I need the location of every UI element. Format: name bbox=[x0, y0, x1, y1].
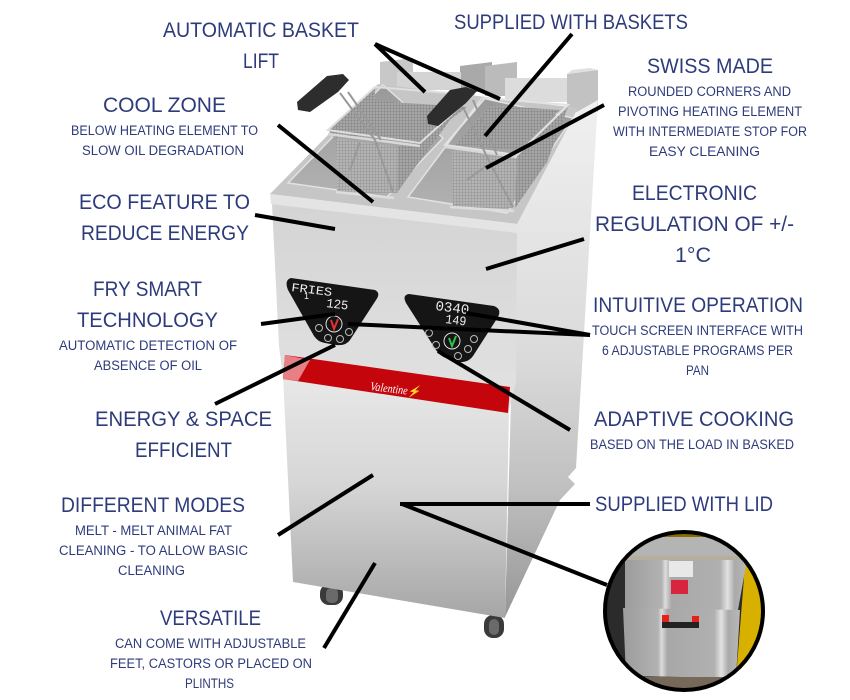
callout: electronic regulation: 1°C bbox=[675, 244, 711, 267]
control panel: left bbox=[287, 278, 378, 345]
callout: different modes bbox=[59, 494, 248, 578]
callout: intuitive operation: PAN bbox=[686, 363, 709, 378]
control panel: left: 125 bbox=[326, 296, 349, 314]
callout: automatic basket lift: AUTOMATIC BASKET bbox=[163, 19, 359, 42]
lower front panel bbox=[283, 376, 509, 618]
basket: right bbox=[445, 98, 568, 211]
callout: swiss made: WITH INTERMEDIATE STOP FOR bbox=[613, 124, 807, 139]
callout: fry smart technology: FRY SMART bbox=[93, 278, 202, 301]
red band bbox=[283, 355, 510, 413]
callout: swiss made: ROUNDED CORNERS AND bbox=[628, 84, 791, 99]
photo: fryer lid bbox=[604, 531, 764, 691]
callout: intuitive operation: INTUITIVE OPERATION bbox=[593, 294, 803, 317]
callout: versatile: FEET, CASTORS OR PLACED ON bbox=[110, 656, 312, 671]
callout: fry smart technology: TECHNOLOGY bbox=[77, 309, 218, 332]
display text: 0340 bbox=[434, 299, 470, 319]
callout: swiss made: EASY CLEANING bbox=[649, 144, 760, 159]
right side panel bbox=[505, 100, 598, 617]
callout: swiss made: SWISS MADE bbox=[647, 55, 773, 78]
callout: eco feature bbox=[79, 191, 250, 245]
brand name: Valentine⚡ bbox=[370, 379, 422, 399]
callout: cool zone: BELOW HEATING ELEMENT TO bbox=[71, 123, 258, 138]
leader lines bbox=[215, 34, 607, 648]
control panel: right: 149 bbox=[445, 312, 467, 330]
callout: intuitive operation: TOUCH SCREEN INTERFACE WITH bbox=[592, 323, 803, 338]
callout: energy and space efficient: ENERGY & SPACE bbox=[95, 408, 272, 431]
fryer illustration bbox=[270, 58, 598, 638]
handle: left bbox=[297, 74, 349, 112]
callout: intuitive operation bbox=[592, 294, 803, 378]
callout: automatic basket lift: LIFT bbox=[243, 50, 279, 73]
callout: versatile: CAN COME WITH ADJUSTABLE bbox=[115, 636, 306, 651]
callout: fry smart technology: AUTOMATIC DETECTION OF bbox=[59, 338, 237, 353]
top plate bbox=[270, 84, 578, 233]
callout: fry smart technology bbox=[59, 278, 237, 373]
handle: right bbox=[427, 87, 477, 126]
callout: intuitive operation: 6 ADJUSTABLE PROGRAMS PER bbox=[602, 343, 793, 358]
callout: adaptive cooking: BASED ON THE LOAD IN BASKED bbox=[590, 437, 794, 452]
callout: supplied with lid: SUPPLIED WITH LID bbox=[595, 493, 773, 516]
callout: versatile: PLINTHS bbox=[185, 676, 234, 691]
caster: left bbox=[320, 584, 343, 605]
callout: different modes: MELT - MELT ANIMAL FAT bbox=[75, 523, 232, 538]
callout: swiss made: PIVOTING HEATING ELEMENT bbox=[618, 104, 802, 119]
callout: eco feature: REDUCE ENERGY bbox=[81, 222, 249, 245]
upper front panel bbox=[272, 204, 517, 410]
control panel: left: 1 bbox=[304, 291, 309, 301]
callout: supplied with baskets: SUPPLIED WITH BASKETS bbox=[454, 11, 688, 34]
callout: fry smart technology: ABSENCE OF OIL bbox=[94, 358, 202, 373]
callout: electronic regulation: ELECTRONIC bbox=[632, 182, 757, 205]
callout: versatile: VERSATILE bbox=[160, 607, 261, 630]
caster: right bbox=[484, 615, 504, 638]
callout: automatic basket lift bbox=[163, 19, 359, 73]
basket: left bbox=[328, 87, 473, 198]
callout: energy and space efficient: EFFICIENT bbox=[135, 439, 232, 462]
callout: swiss made bbox=[613, 55, 807, 159]
callout: cool zone: COOL ZONE bbox=[103, 94, 226, 117]
callout: adaptive cooking: ADAPTIVE COOKING bbox=[594, 408, 794, 431]
display text: FRIES bbox=[291, 281, 333, 300]
callout: adaptive cooking bbox=[590, 408, 794, 452]
rear boxes and heating element bbox=[380, 58, 598, 112]
callout: versatile bbox=[110, 607, 312, 691]
callout: different modes: CLEANING bbox=[118, 563, 185, 578]
callout: different modes: CLEANING - TO ALLOW BASIC bbox=[59, 543, 248, 558]
callout: different modes: DIFFERENT MODES bbox=[61, 494, 245, 517]
callout: electronic regulation bbox=[595, 182, 794, 267]
callout: eco feature: ECO FEATURE TO bbox=[79, 191, 250, 214]
callout: cool zone: SLOW OIL DEGRADATION bbox=[82, 143, 244, 158]
callout: electronic regulation: REGULATION OF +/- bbox=[595, 213, 794, 236]
callout: energy and space efficient bbox=[95, 408, 272, 462]
control panel: right bbox=[405, 294, 499, 362]
callout: cool zone bbox=[71, 94, 258, 158]
